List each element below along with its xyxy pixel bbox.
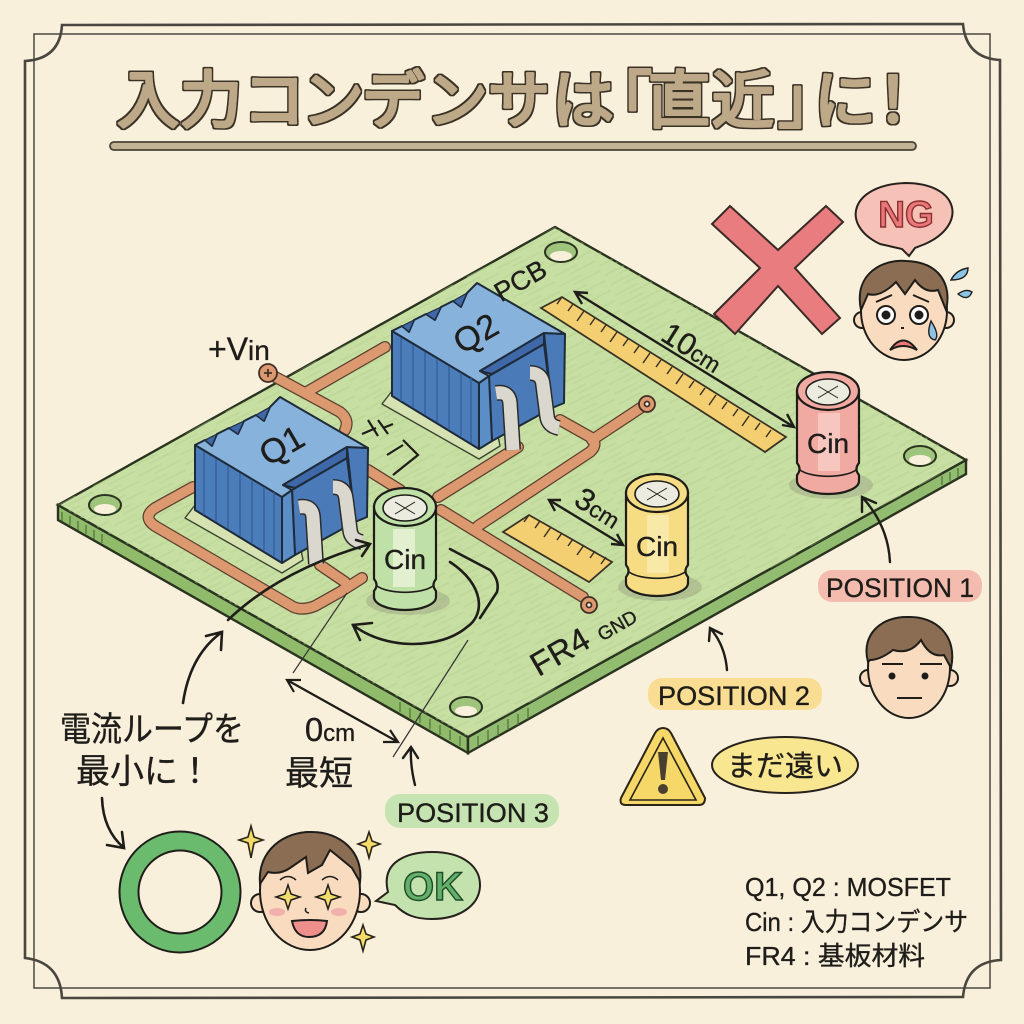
MOSFET Q2: Q2 [447,306,505,362]
OK speech bubble [376,852,480,919]
capacitor Cin yellow [618,474,702,601]
MOSFET Q2 [382,283,565,459]
GND and FR4 labels [524,607,641,683]
neutral face [860,617,958,718]
sparkles [239,826,380,951]
big red cross [712,206,843,334]
capacitor Cin green: Cin [384,544,426,575]
mada tooi bubble: まだ遠い [727,743,843,785]
current loop note: 最小に！ [76,744,212,793]
legend [745,872,968,971]
NG speech bubble [856,183,952,256]
PCB board [58,227,966,753]
long ruler 10cm [541,297,786,452]
OK speech bubble: OK [403,865,463,909]
happy face [251,832,370,950]
0cm dimension arrow [287,680,398,742]
mounting holes [89,242,936,717]
POSITION 3 tag: POSITION 3 [397,798,549,828]
capacitor Cin yellow: Cin [636,531,678,562]
capacitor Cin pink: Cin [807,428,849,459]
current loop arrows around capacitor [353,549,498,644]
arrow to position 1 [862,497,890,562]
POSITION 1 tag: POSITION 1 [826,573,974,603]
mada tooi bubble [712,737,858,793]
current loop note [60,702,244,793]
legend: FR4 : 基板材料 [745,941,925,971]
dimension arrow 3cm [549,480,628,545]
capacitor Cin green [366,488,450,615]
capacitor Cin pink [789,372,873,499]
copper traces [148,347,645,609]
arrow to position 2 [709,628,727,670]
arrow to position 3 [403,747,418,785]
warning triangle icon [621,728,705,805]
legend: Cin : 入力コンデンサ [745,907,968,937]
MOSFET Q1 [185,397,368,573]
schematic marks [362,420,418,475]
worried face [854,261,972,360]
PCB label: PCB [489,254,552,308]
current loop note: 電流ループを [60,702,244,751]
0cm shortest label: 0cm [305,711,355,748]
NG speech bubble: NG [878,194,934,235]
0cm shortest label [285,711,355,795]
trace pads [259,364,655,613]
+Vin label: +Vin [208,331,270,367]
green loop ring [129,841,231,943]
dimension arrow 10cm [575,292,794,427]
legend: Q1, Q2 : MOSFET [745,872,951,902]
GND and FR4 labels: GND [594,607,641,646]
dimension arrow 10cm: 10cm [655,315,729,380]
arrow from note to loop [102,540,370,848]
POSITION 2 tag: POSITION 2 [658,681,810,711]
dimension arrow 3cm: 3cm [569,480,628,535]
MOSFET Q1: Q1 [253,418,311,474]
title: 入力コンデンサは「直近」に！ [117,50,924,140]
GND and FR4 labels: FR4 [524,620,596,683]
thin guide lines [293,593,468,757]
short ruler 3cm [503,515,612,582]
0cm shortest label: 最短 [285,746,353,795]
